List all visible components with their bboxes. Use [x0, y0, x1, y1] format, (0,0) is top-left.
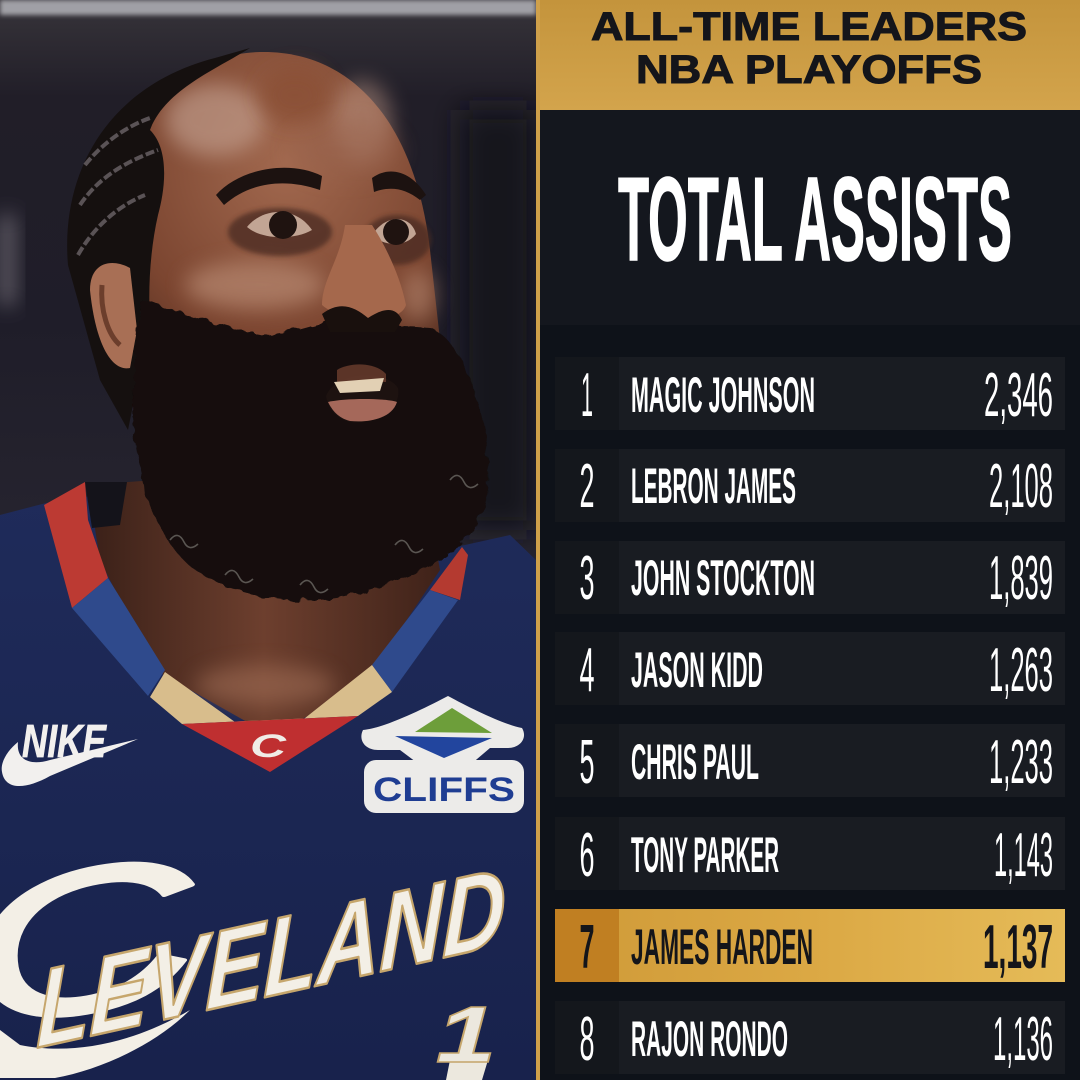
- jersey: [0, 490, 536, 1080]
- divider: gold: [536, 0, 540, 1080]
- nose: [322, 225, 406, 320]
- row 1: MAGIC JOHNSON: [631, 367, 815, 423]
- neck: [88, 460, 440, 735]
- row 7: highlighted: 7: [580, 913, 594, 982]
- row 8: RAJON RONDO: [631, 1011, 788, 1067]
- row 5: 5: [580, 728, 594, 797]
- eyes: [247, 212, 312, 237]
- jersey wordmark: LEVELAND: [35, 845, 507, 1072]
- under-eye shadows: [228, 208, 332, 256]
- row 4: [555, 632, 1065, 705]
- row 6: 6: [580, 821, 594, 890]
- jersey number: 1: [436, 990, 496, 1080]
- icon: cliffs sponsor logo: [361, 696, 524, 813]
- row 6: TONY PARKER: [631, 827, 779, 883]
- collar inner: [85, 482, 127, 528]
- icon: cliffs sponsor logo: CLIFFS: [373, 771, 515, 809]
- row 6: [555, 817, 1065, 890]
- row 7: highlighted: [555, 909, 1065, 982]
- collar red v: [182, 716, 358, 772]
- row 5: [555, 724, 1065, 797]
- head: [100, 52, 440, 420]
- row 7: highlighted: JAMES HARDEN: [631, 919, 813, 975]
- row 8: 8: [580, 1005, 594, 1074]
- forehead tones: [165, 84, 265, 156]
- beard: [133, 300, 488, 600]
- row 2: 2: [580, 452, 594, 521]
- ear: [90, 263, 137, 368]
- collar red: [44, 482, 108, 608]
- hair: [67, 48, 250, 430]
- row 2: [555, 449, 1065, 522]
- nostrils: [322, 306, 402, 332]
- mouth: [326, 375, 398, 422]
- row 3: 3: [580, 544, 594, 613]
- row 3: JOHN STOCKTON: [631, 550, 815, 606]
- icon: jersey C logo: C: [250, 728, 287, 764]
- heading: all-time leaders: ALL-TIME LEADERS: [591, 5, 1027, 49]
- row 2: LEBRON JAMES: [631, 458, 796, 514]
- icon: nike logo: [2, 715, 138, 786]
- header band: [540, 0, 1080, 110]
- panel: player photo: [0, 0, 536, 1080]
- collar cream: [150, 665, 392, 724]
- row 1: [555, 357, 1065, 430]
- row 4: 4: [580, 636, 594, 705]
- row 5: CHRIS PAUL: [631, 734, 759, 790]
- icon: nike logo: NIKE: [22, 715, 107, 767]
- row 8: [555, 1001, 1065, 1074]
- collar blue: [72, 578, 165, 696]
- row 3: [555, 541, 1065, 614]
- panel: right background: [540, 110, 1080, 1080]
- eyebrows: [216, 168, 322, 205]
- beard curls: [170, 475, 478, 593]
- cheek highlights: [185, 261, 325, 309]
- row 1: 1: [581, 361, 593, 430]
- heading: nba playoffs: NBA PLAYOFFS: [636, 48, 982, 92]
- leaderboard table: [555, 357, 1065, 1074]
- row 4: JASON KIDD: [631, 642, 763, 698]
